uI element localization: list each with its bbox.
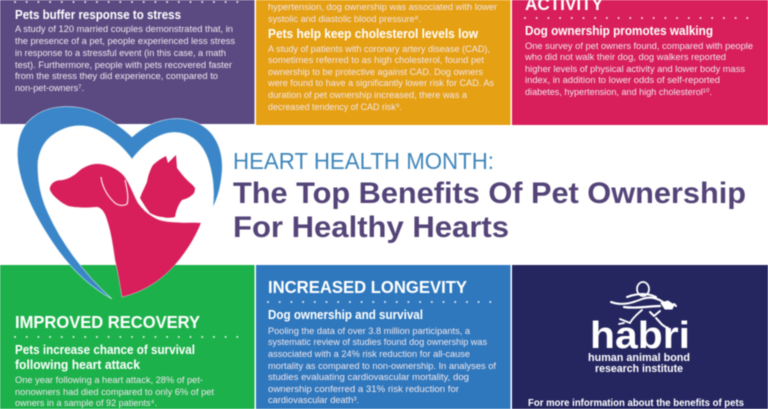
icon: habri logo mark — [611, 282, 676, 328]
heading: pets increase chance of survival: Pets increase chance of survival — [15, 342, 195, 357]
icon: heart with dog and cat — [17, 107, 222, 299]
text block: cholesterol study: ownership to be protective against CAD. Dog owners — [268, 67, 483, 78]
panel: activity — [512, 0, 768, 125]
text block: walking survey: One survey of pet owners found, compared with people — [525, 41, 753, 52]
text block: blood pressure study: systolic and diastolic blood pressure⁸. — [268, 14, 421, 25]
text block: longevity review: systematic review of studies found dog ownership was — [268, 337, 487, 348]
logo tagline: human animal bond — [588, 352, 690, 364]
text block: stress study: non-pet-owners⁷. — [15, 83, 84, 94]
dog ear — [101, 177, 128, 205]
panel: pets buffer response to stress — [0, 0, 254, 124]
text block: longevity review — [268, 326, 496, 406]
text block: survival study: One year following a heart attack, 28% of pet- — [15, 375, 203, 386]
title: For Healthy Hearts — [233, 211, 509, 244]
title block — [233, 148, 746, 244]
text block: walking survey: diabetes, hypertension, and high cholesterol¹⁰. — [525, 87, 712, 98]
heading: pets buffer response to stress: Pets buffer response to stress — [15, 7, 181, 22]
heading: pets increase chance of survival: following heart attack — [15, 357, 141, 372]
text block: stress study: from the stress they did experience, compared to — [15, 71, 218, 82]
text block: walking survey: higher levels of physical activity and lower body mass — [525, 64, 745, 75]
text block: longevity review: cardiovascular death³. — [268, 395, 359, 406]
heading: increased longevity: INCREASED LONGEVITY — [268, 277, 467, 297]
text block: blood pressure study: hypertension, dog ownership was associated with lower — [268, 2, 498, 13]
logo wordmark: habri: habri — [590, 315, 690, 357]
cat silhouette — [140, 155, 195, 218]
text block: stress study: A study of 120 married couples demonstrated that, in — [15, 24, 233, 35]
text block: longevity review: associated with a 24% risk reduction for all-cause — [268, 349, 470, 360]
text block: walking survey: who did not walk their dog, dog walkers reported — [524, 52, 726, 63]
heading: dog ownership promotes walking: Dog ownership promotes walking — [525, 23, 713, 38]
heading: pets increase chance of survival — [15, 342, 195, 372]
text block: longevity review: ownership conferred a 31% risk reduction for — [268, 384, 460, 395]
text block: longevity review: studies evaluating cardiovascular mortality, dog — [268, 372, 469, 383]
heading: improved recovery: IMPROVED RECOVERY — [15, 312, 200, 332]
logo tagline — [588, 352, 690, 375]
text block: survival study: nonowners had died compared to only 6% of pet — [15, 387, 214, 398]
heart outline — [17, 107, 222, 299]
text block: cholesterol study: sometimes referred to as high cholesterol, found pet — [268, 55, 484, 66]
text block: cholesterol study — [267, 44, 494, 113]
text block: walking survey — [524, 41, 753, 98]
heading: pets help keep cholesterol levels low: Pets help keep cholesterol levels low — [268, 26, 479, 41]
text block: survival study: owners in a sample of 92 patients⁴. — [15, 398, 157, 409]
text block: longevity review: Pooling the data of over 3.8 million participants, a — [268, 326, 471, 337]
text block: cholesterol study: duration of pet ownership increased, there was a — [268, 90, 468, 101]
call to action: For more information about the benefits of pets — [528, 398, 744, 409]
text block: stress study — [15, 24, 235, 94]
text block: walking survey: index, in addition to lower odds of self-reported — [525, 75, 720, 86]
logo tagline: research institute — [595, 363, 683, 375]
panel: habri — [512, 265, 768, 409]
text block: survival study — [15, 375, 214, 409]
title — [233, 177, 746, 244]
panel: increased longevity — [256, 265, 510, 409]
text block: cholesterol study: decreased tendency of CAD risk⁹. — [268, 102, 402, 113]
text block: stress study: the presence of a pet, people experienced less stress — [15, 36, 235, 47]
text block: cholesterol study: were found to have a significantly lower risk for CAD. As — [267, 78, 494, 89]
text block: stress study: test). Furthermore, people with pets recovered faster — [15, 60, 233, 71]
panel: improved recovery — [0, 265, 254, 409]
text block: longevity review: mortality as compared to non-ownership. In analyses of — [268, 361, 496, 372]
dog silhouette — [50, 164, 201, 297]
text block: cholesterol study: A study of patients with coronary artery disease (CAD), — [268, 44, 490, 55]
title: The Top Benefits Of Pet Ownership — [233, 177, 746, 210]
panel: blood pressure and cholesterol — [256, 0, 510, 125]
text block: blood pressure study — [268, 2, 498, 25]
text block: stress study: in response to a stressful event (in this case, a math — [15, 48, 226, 59]
subtitle: heart health month: HEART HEALTH MONTH: — [233, 148, 494, 174]
heading: dog ownership and survival: Dog ownership and survival — [268, 307, 423, 322]
